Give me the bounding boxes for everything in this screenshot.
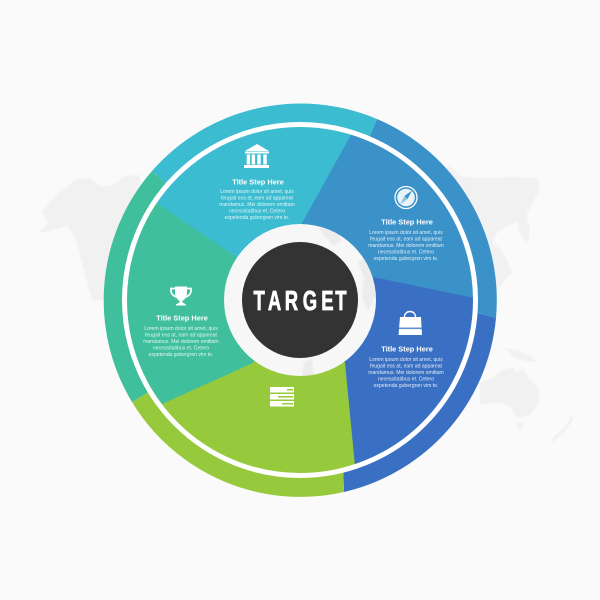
step: trophy [143, 286, 219, 358]
step: server icon [270, 387, 294, 406]
body text [143, 326, 219, 358]
step: shopping bag [368, 312, 444, 389]
step: compass [368, 186, 444, 262]
center target badge [224, 224, 378, 376]
body text: expetenda gubergren vim te. [374, 383, 438, 389]
body text: necessitatibus et. Cetero [378, 250, 434, 256]
title: Title Step Here [156, 314, 208, 322]
body text [368, 357, 444, 389]
body text: Lorem ipsum dolor sit amet, quis [369, 357, 443, 363]
inner wedge: green [162, 300, 355, 474]
inner wedge: teal [155, 125, 352, 300]
outer band: teal segment [152, 104, 377, 300]
body text: Lorem ipsum dolor sit amet, quis [144, 326, 218, 332]
outer band: indigo segment [300, 300, 496, 492]
inner wedge: indigo [300, 277, 474, 466]
inner wedge: blue [300, 133, 474, 300]
icon: server [270, 387, 294, 406]
panel: segmented circle [104, 104, 497, 497]
icon: bank [244, 144, 269, 168]
body text: Lorem ipsum dolor sit amet, quis [369, 230, 443, 236]
body text: mandamus. Mei dolorem omittam [368, 370, 444, 376]
body text: feugait eos at, eam ad appareat [221, 196, 294, 202]
body text: expetenda gubergren vim te. [374, 256, 438, 262]
inner wedge: sea green [126, 202, 300, 404]
body text: mandamus. Mei dolorem omittam [368, 243, 444, 249]
outer band: green segment [132, 300, 344, 497]
body text [219, 189, 295, 221]
body text: Lorem ipsum dolor sit amet, quis [220, 189, 294, 195]
body text: feugait eos at, eam ad appareat [370, 364, 443, 370]
body text: necessitatibus et. Cetero [229, 208, 285, 214]
body text [368, 230, 444, 262]
world map background [36, 166, 573, 442]
body text: feugait eos at, eam ad appareat [370, 236, 443, 242]
title: Title Step Here [381, 344, 433, 354]
center light ring [224, 224, 376, 376]
body text: mandamus. Mei dolorem omittam [219, 202, 295, 208]
body text: expetenda gubergren vim te. [149, 352, 213, 358]
body text: feugait eos at, eam ad appareat [145, 332, 218, 338]
body text: mandamus. Mei dolorem omittam [143, 339, 219, 345]
target label: TARGET [253, 286, 347, 317]
body text: expetenda gubergren vim te. [225, 215, 289, 221]
body text: necessitatibus et. Cetero [153, 346, 209, 352]
body text: necessitatibus et. Cetero [378, 376, 434, 382]
title: Title Step Here [232, 178, 284, 186]
outer band: blue segment [300, 119, 497, 318]
icon: compass [395, 186, 417, 208]
icon: shopping bag [398, 312, 423, 335]
outer band: sea green segment [104, 171, 300, 402]
step: bank [219, 144, 295, 221]
white ring [124, 124, 476, 476]
title: Title Step Here [381, 218, 433, 226]
icon: trophy [171, 286, 191, 306]
center dark circle [242, 242, 358, 358]
